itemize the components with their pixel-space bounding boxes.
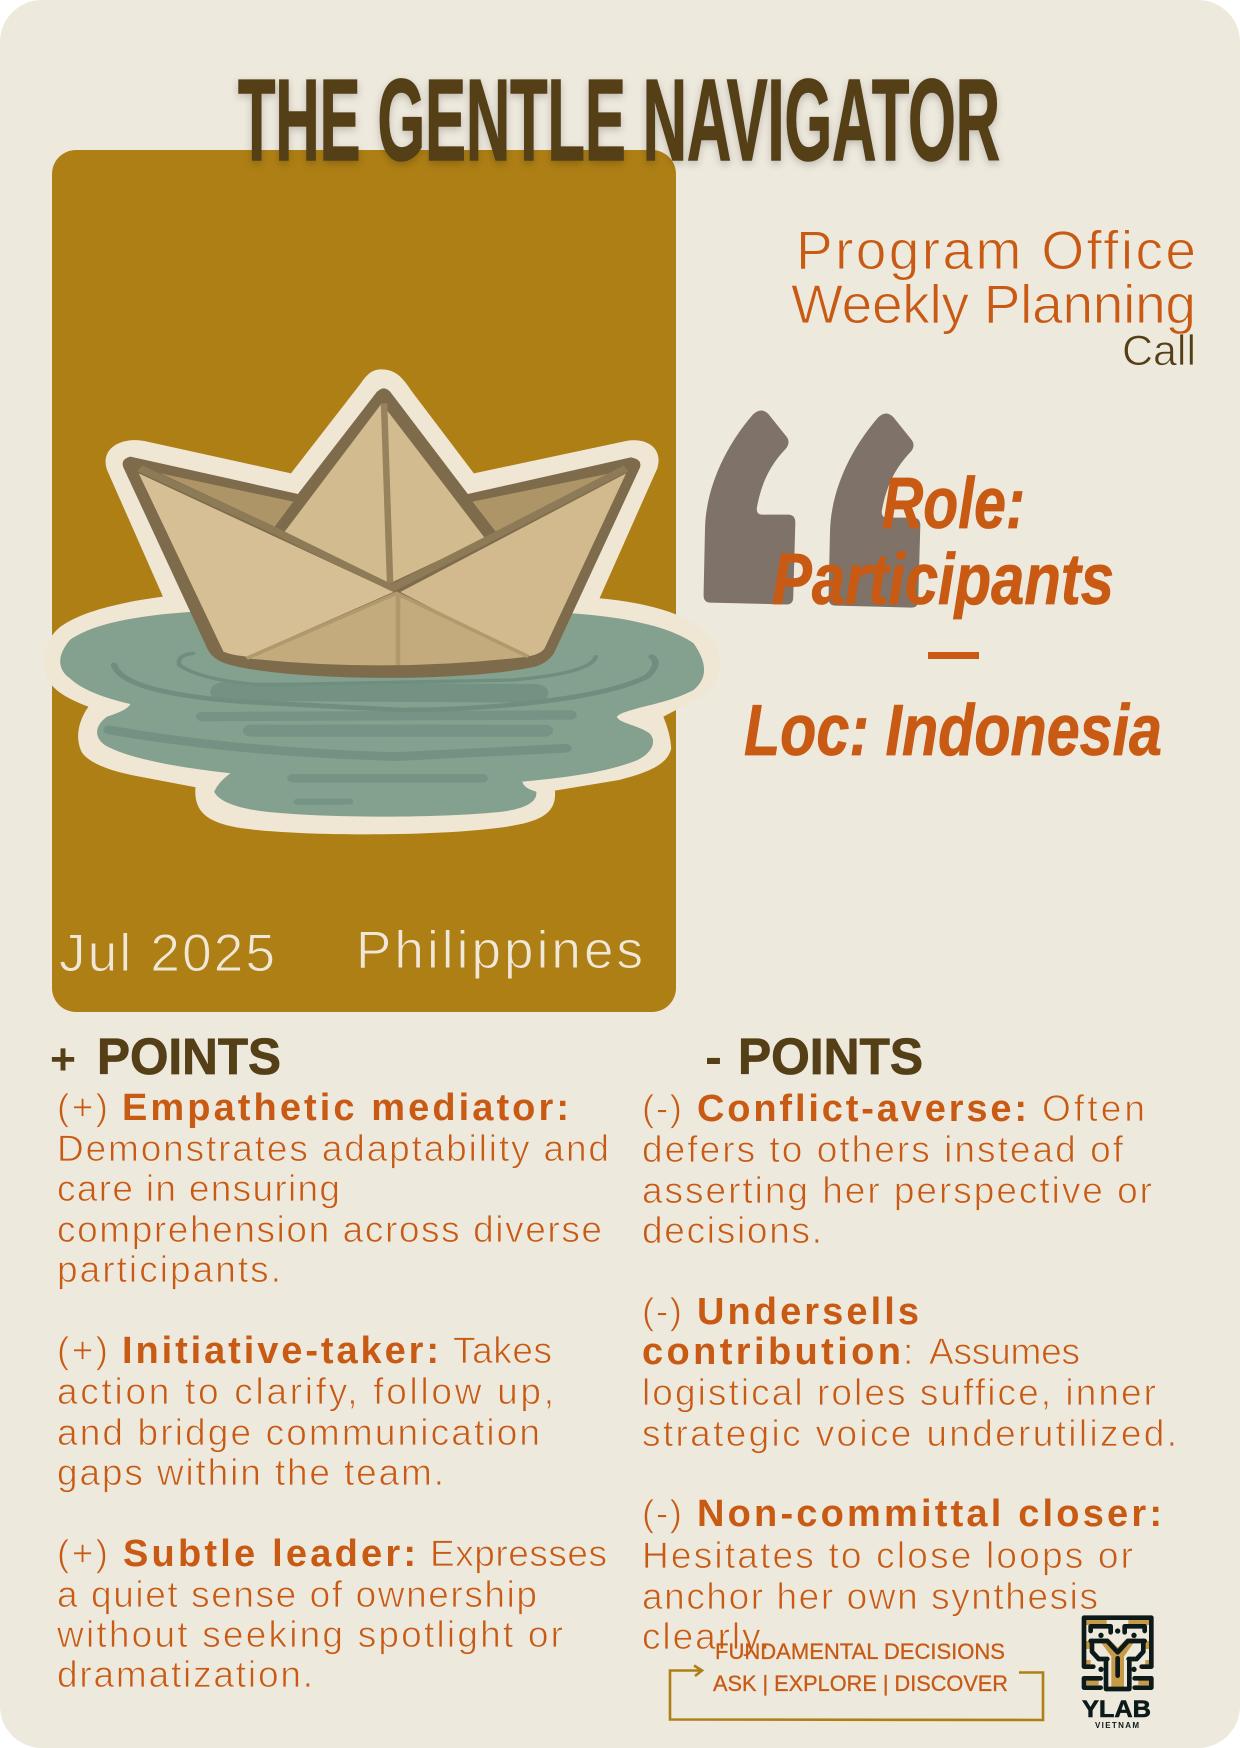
- logo mark: [1084, 1618, 1151, 1689]
- point: initiative-taker: Initiative-taker:: [122, 1330, 439, 1372]
- point: undersells contribution: :: [903, 1331, 913, 1372]
- point: conflict-averse: Often: [1042, 1088, 1145, 1129]
- point: conflict-averse: decisions.: [642, 1210, 822, 1251]
- point: undersells contribution: [642, 1291, 1177, 1454]
- icon: quotation marks: [704, 410, 920, 608]
- point: conflict-averse: (-): [642, 1088, 682, 1129]
- logo: YLAB Vietnam: [1082, 1618, 1151, 1730]
- point: non-committal closer: Non-committal closer:: [697, 1493, 1162, 1535]
- water ripples: [109, 653, 655, 802]
- point: conflict-averse: Conflict-averse:: [697, 1088, 1027, 1130]
- point: empathetic mediator: Empathetic mediator:: [122, 1087, 569, 1129]
- point: subtle leader: a quiet sense of ownership: [57, 1574, 537, 1615]
- card date: Jul 2025: [59, 924, 275, 983]
- boat outline: [123, 388, 640, 678]
- boat hull left panel: [139, 473, 393, 657]
- role and location: Loc: Indonesia: [744, 691, 1162, 771]
- point: undersells contribution: logistical roles suffice, inner: [642, 1372, 1156, 1413]
- point: non-committal closer: anchor her own synthesis: [642, 1576, 1098, 1617]
- point: empathetic mediator: participants.: [57, 1249, 281, 1290]
- point: non-committal closer: clearly.: [642, 1616, 770, 1657]
- sticker outline: [43, 369, 720, 834]
- point: undersells contribution: contribution: [642, 1331, 901, 1373]
- point: non-committal closer: (-): [642, 1493, 682, 1534]
- point: empathetic mediator: comprehension across diverse: [57, 1209, 602, 1250]
- point: non-committal closer: Hesitates to close loops or: [642, 1535, 1133, 1576]
- point: initiative-taker: action to clarify, follow up,: [57, 1371, 554, 1412]
- logo wordmark: YLAB: [1082, 1696, 1151, 1723]
- footer tagline: FUNDAMENTAL DECISIONS: [715, 1639, 1005, 1664]
- minus points list: [642, 1088, 1177, 1657]
- point: non-committal closer: [642, 1493, 1162, 1657]
- point: undersells contribution: (-): [642, 1291, 682, 1332]
- point: undersells contribution: strategic voice underutilized.: [642, 1413, 1177, 1454]
- point: subtle leader: (+): [57, 1533, 108, 1574]
- point: conflict-averse: [642, 1088, 1152, 1251]
- point: subtle leader: dramatization.: [57, 1654, 313, 1695]
- boat folds: [140, 468, 626, 588]
- water: [60, 612, 704, 817]
- card location: Philippines: [356, 921, 643, 980]
- point: initiative-taker: (+): [57, 1330, 108, 1371]
- point: undersells contribution: Assumes: [929, 1331, 1080, 1372]
- subtitle: Weekly Planning: [791, 273, 1196, 335]
- illustration: paper boat on water: [43, 369, 720, 834]
- point: initiative-taker: [57, 1330, 554, 1493]
- boat hull right panel: [400, 473, 626, 657]
- boat hull bottom panel: [247, 593, 528, 665]
- subtitle: Call: [1122, 327, 1196, 375]
- point: subtle leader: [56, 1533, 607, 1695]
- subtitle: Program Office: [796, 219, 1196, 281]
- footer tagline: [713, 1639, 1008, 1696]
- point: undersells contribution: Undersells: [697, 1291, 919, 1333]
- role and location: Role:: [882, 464, 1025, 544]
- point: empathetic mediator: (+): [57, 1087, 108, 1128]
- subtitle: [791, 219, 1196, 375]
- boat back folds: [161, 473, 293, 527]
- footer tagline: ASK | EXPLORE | DISCOVER: [713, 1671, 1008, 1696]
- heading: plus points: +: [50, 1035, 76, 1084]
- boat sail: [284, 403, 485, 583]
- heading: minus points: POINTS: [738, 1028, 923, 1085]
- point: conflict-averse: defers to others instead of: [642, 1129, 1124, 1170]
- point: empathetic mediator: Demonstrates adaptability and: [57, 1128, 609, 1169]
- point: empathetic mediator: [57, 1087, 609, 1290]
- point: subtle leader: without seeking spotlight or: [56, 1614, 563, 1655]
- image card: [52, 150, 676, 1012]
- logo subtitle: VIETNAM: [1095, 1721, 1139, 1730]
- heading: minus points: -: [705, 1028, 722, 1085]
- point: initiative-taker: and bridge communication: [57, 1412, 540, 1453]
- point: initiative-taker: gaps within the team.: [57, 1452, 444, 1493]
- point: conflict-averse: asserting her perspective or: [642, 1170, 1152, 1211]
- point: subtle leader: Expresses: [430, 1533, 607, 1574]
- heading: plus points: POINTS: [97, 1028, 281, 1085]
- footer arrow: [670, 1666, 1043, 1720]
- point: initiative-taker: Takes: [453, 1330, 552, 1371]
- point: subtle leader: Subtle leader:: [123, 1533, 416, 1575]
- point: empathetic mediator: care in ensuring: [57, 1168, 340, 1209]
- plus points list: [56, 1087, 609, 1695]
- role and location: [744, 464, 1162, 771]
- role and location: Participants: [772, 540, 1114, 620]
